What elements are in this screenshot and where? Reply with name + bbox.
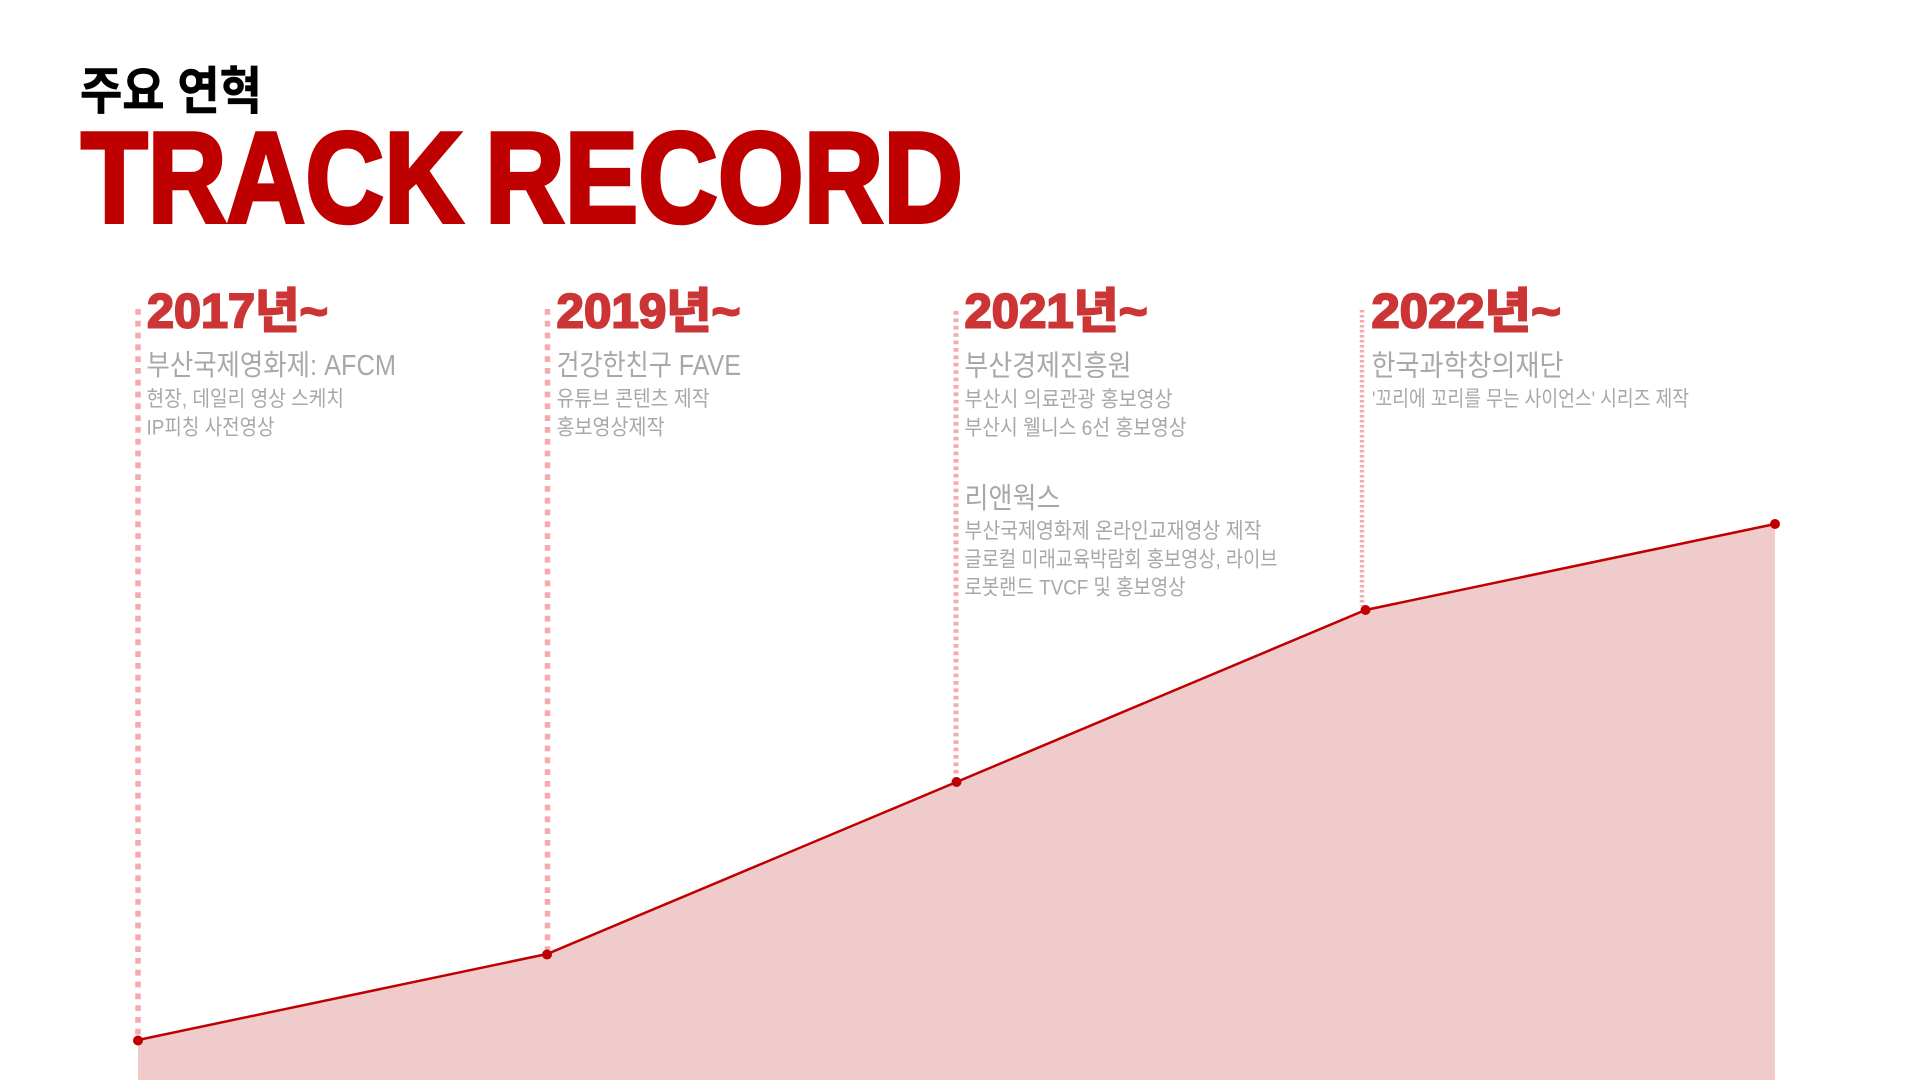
dotted marker: 2019 [545, 309, 550, 950]
panel: 2022 [1372, 286, 1689, 411]
body line: '꼬리에 꼬리를 무는 사이언스' 시리즈 제작 [1372, 387, 1689, 411]
panel: 2019 [556, 286, 741, 440]
body line: 글로컬 미래교육박람회 홍보영상, 라이브 [964, 548, 1278, 572]
body line: IP피칭 사전영상 [146, 416, 275, 440]
panel: 2021 [964, 286, 1278, 600]
panel: 2017 [146, 286, 396, 440]
year heading 2019: 2019년~ [556, 286, 740, 338]
title: TRACK RECORD: RECORD [485, 106, 963, 250]
body line: 현장, 데일리 영상 스케치 [146, 387, 344, 411]
body line: 부산국제영화제 온라인교재영상 제작 [964, 519, 1262, 543]
subtitle: 주요 연혁: 주요 연혁 [80, 63, 262, 120]
body line: 유튜브 콘텐츠 제작 [556, 387, 710, 411]
dotted marker: 2022 [1360, 310, 1364, 606]
client heading: 부산경제진흥원 [964, 350, 1132, 382]
body line: 홍보영상제작 [556, 416, 665, 440]
client heading: 건강한친구 FAVE [556, 350, 741, 382]
client heading: 한국과학창의재단 [1372, 350, 1564, 382]
client heading: 부산국제영화제: AFCM [146, 350, 396, 382]
trend line [138, 524, 1775, 1040]
body line: 로봇랜드 TVCF 및 홍보영상 [964, 576, 1186, 600]
dotted marker: 2021 [954, 311, 958, 778]
client heading: 리앤웍스 [964, 483, 1060, 515]
year heading 2022: 2022년~ [1372, 286, 1561, 338]
body line: 부산시 의료관광 홍보영상 [964, 388, 1173, 412]
title: TRACK RECORD [81, 106, 963, 250]
year heading 2017: 2017년~ [147, 286, 328, 338]
year heading 2021: 2021년~ [964, 286, 1148, 338]
dotted marker: 2017 [135, 309, 141, 1036]
area chart: growth fill [138, 524, 1775, 1080]
title: TRACK RECORD: TRACK [81, 106, 463, 250]
body line: 부산시 웰니스 6선 홍보영상 [964, 416, 1187, 440]
data points [133, 519, 1780, 1046]
